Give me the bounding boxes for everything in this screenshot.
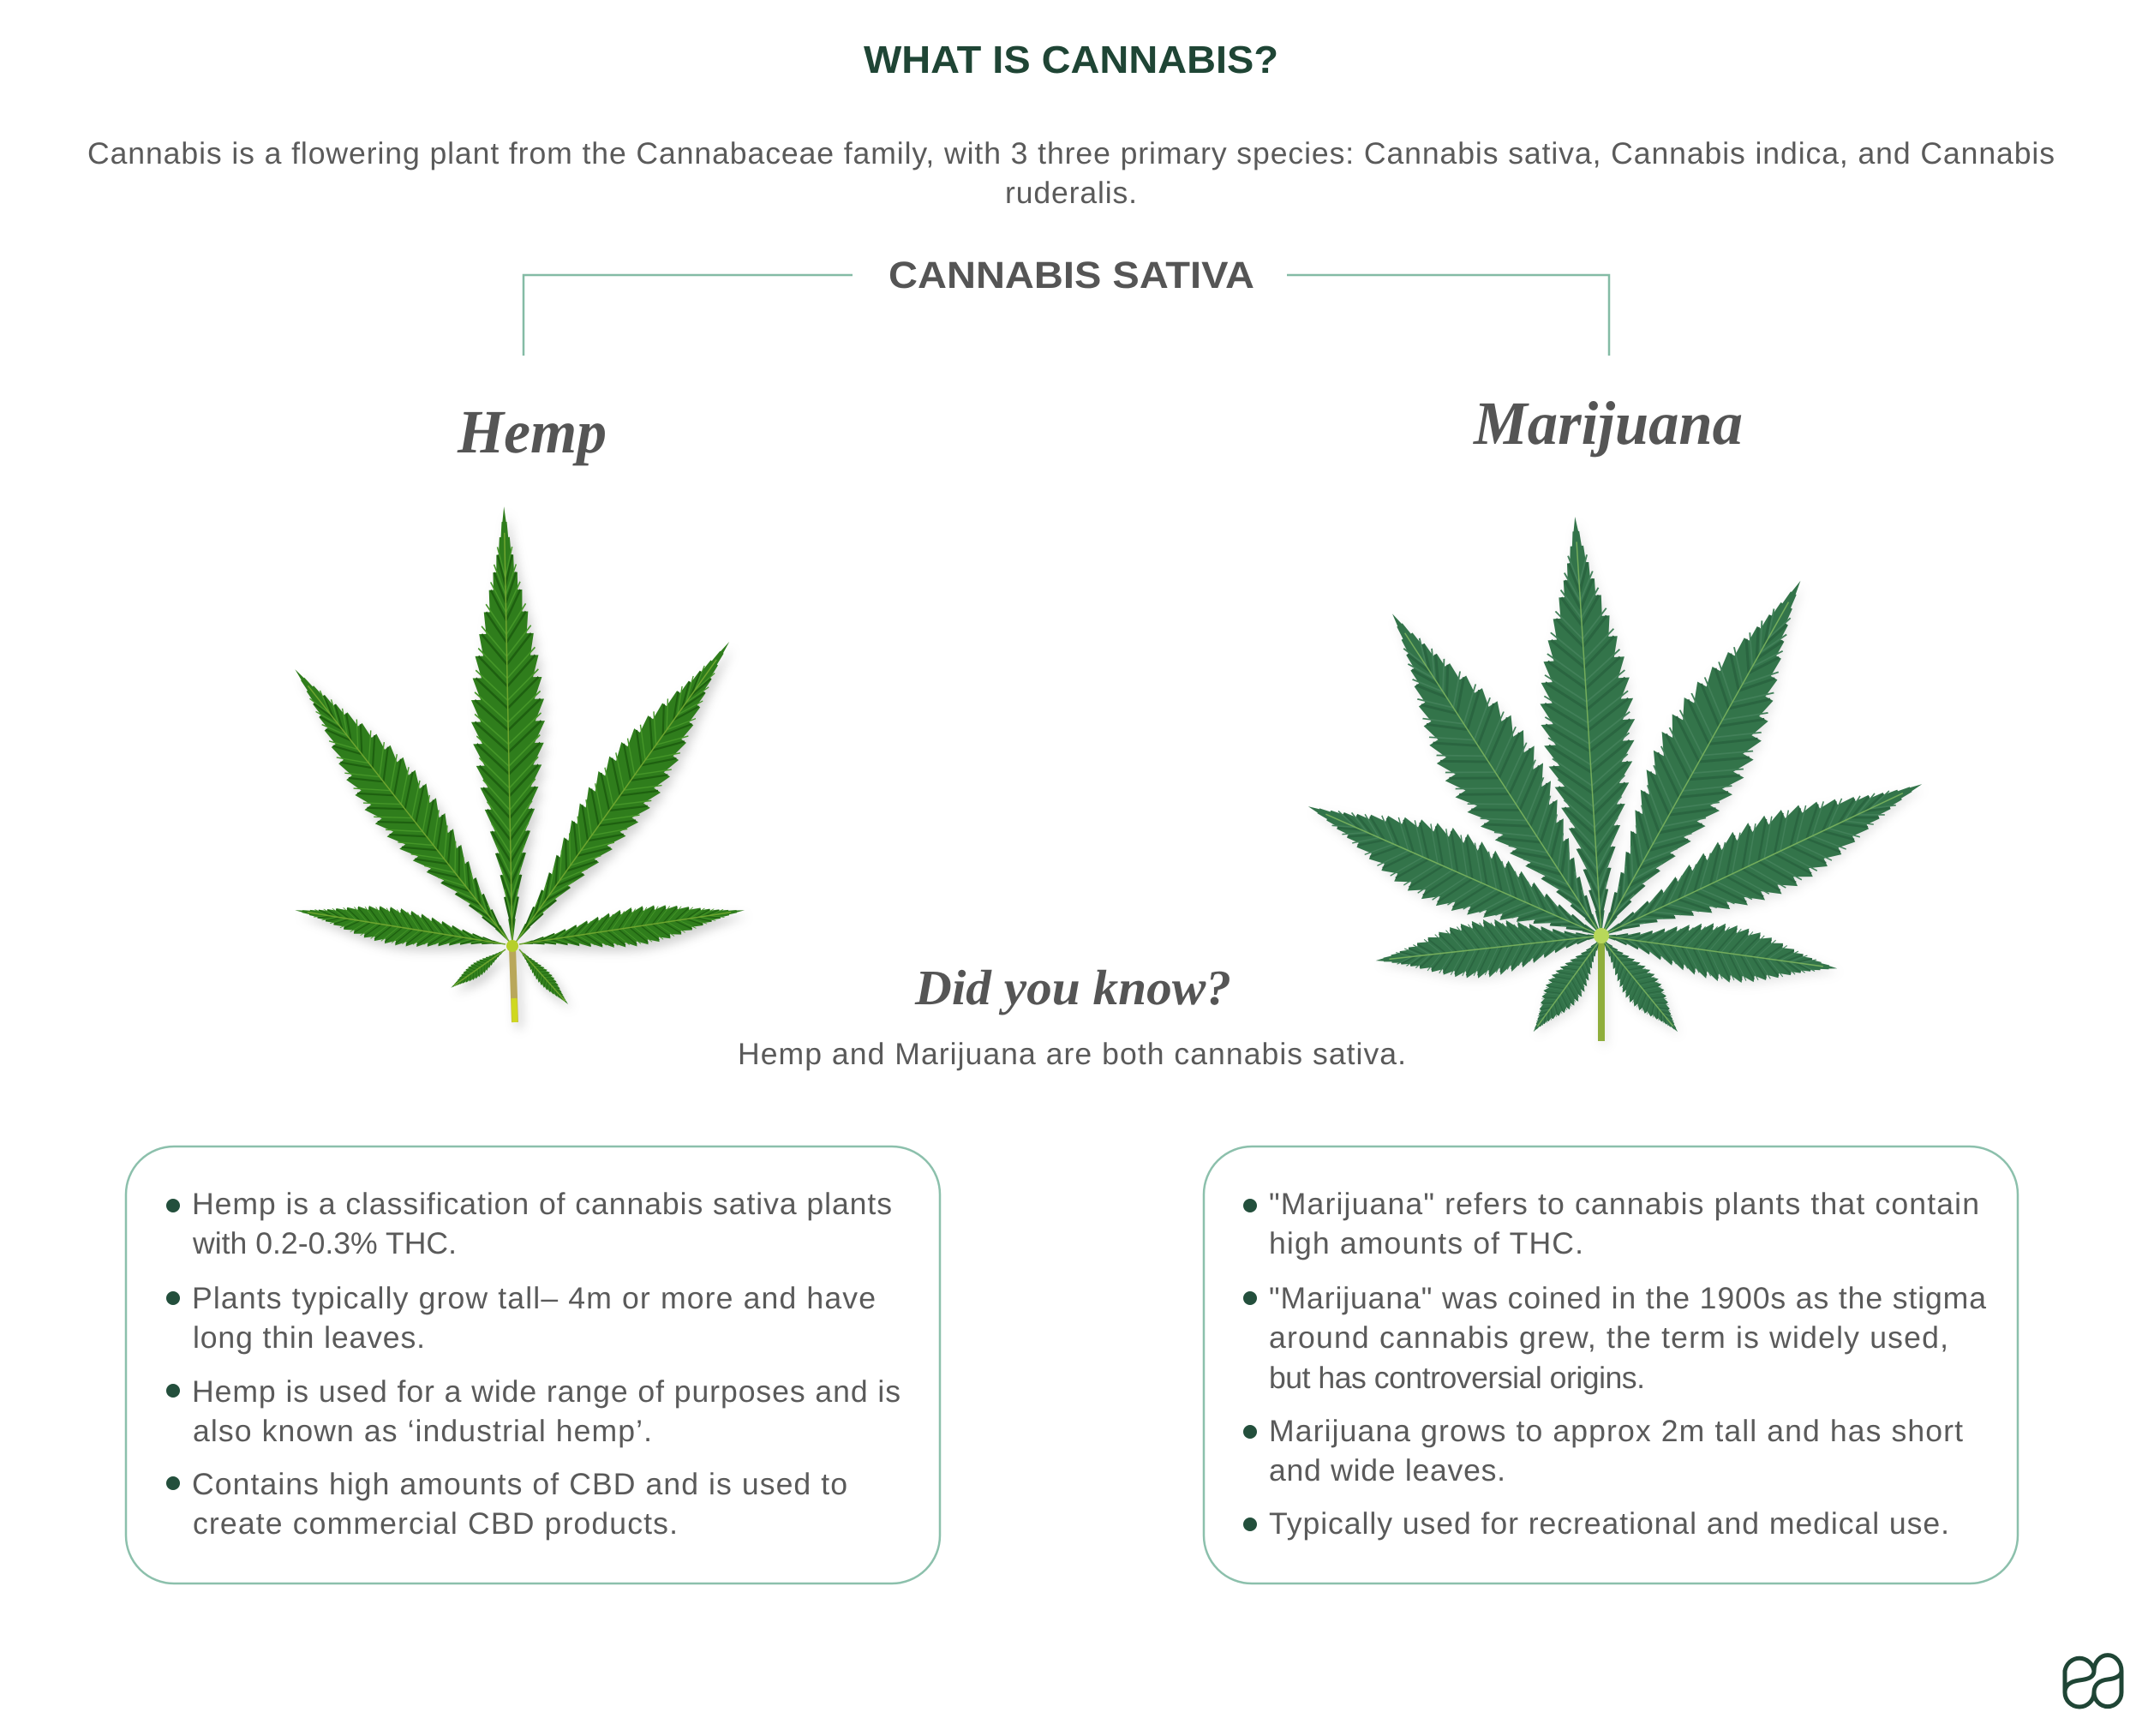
bullet list: long thin leaves. (193, 1320, 425, 1355)
heading: cannabis sativa: CANNABIS SATIVA (889, 254, 1254, 296)
bullet list: Hemp is a classification of cannabis sativa plants (192, 1187, 892, 1221)
bullet list: high amounts of THC. (1269, 1226, 1583, 1260)
title: WHAT IS CANNABIS? (864, 38, 1278, 81)
bullet list: also known as ‘industrial hemp’. (193, 1414, 652, 1448)
bullet list: and wide leaves. (1269, 1453, 1505, 1488)
stem (512, 947, 515, 1022)
bullet list: Hemp is used for a wide range of purposes and is (192, 1374, 900, 1409)
bullet list: create commercial CBD products. (193, 1506, 678, 1541)
panel: marijuana facts (1204, 1146, 2018, 1583)
stem (1598, 938, 1605, 1041)
marijuana leaf (1292, 514, 1939, 1044)
panel: hemp facts (126, 1146, 940, 1583)
bullet list: Contains high amounts of CBD and is used to (192, 1467, 847, 1501)
intro text: Cannabis is a flowering plant from the Cannabaceae family, with 3 three primary species: Cannabis sativa, Cannabis indica, and Cannabis (87, 136, 2055, 171)
bracket left (524, 275, 853, 356)
hemp leaf (269, 506, 755, 1022)
did you know text: Hemp and Marijuana are both cannabis sativa. (738, 1037, 1406, 1071)
bullet list: around cannabis grew, the term is widely used, (1269, 1320, 1948, 1355)
heading: did you know: Did you know? (914, 960, 1231, 1015)
heading: marijuana: Marijuana (1473, 389, 1743, 458)
bullet list: Marijuana grows to approx 2m tall and has short (1269, 1414, 1963, 1448)
bullet list: with 0.2-0.3% THC. (192, 1226, 457, 1260)
heading: hemp: Hemp (457, 398, 607, 466)
intro text: ruderalis. (1005, 176, 1137, 210)
bullet list: "Marijuana" was coined in the 1900s as the stigma (1269, 1281, 1986, 1315)
bracket right (1287, 275, 1609, 356)
intro text (87, 136, 2055, 210)
bullet list: but has controversial origins. (1269, 1361, 1645, 1395)
bullet list: Typically used for recreational and medical use. (1269, 1506, 1949, 1541)
panel border (126, 1146, 940, 1583)
bullet list (1243, 1187, 1986, 1541)
bullet list: Plants typically grow tall– 4m or more and have (192, 1281, 876, 1315)
panel border (1204, 1146, 2018, 1583)
icon: logo (2065, 1655, 2121, 1707)
bullet list (166, 1187, 900, 1541)
bullet list: "Marijuana" refers to cannabis plants that contain (1269, 1187, 1979, 1221)
